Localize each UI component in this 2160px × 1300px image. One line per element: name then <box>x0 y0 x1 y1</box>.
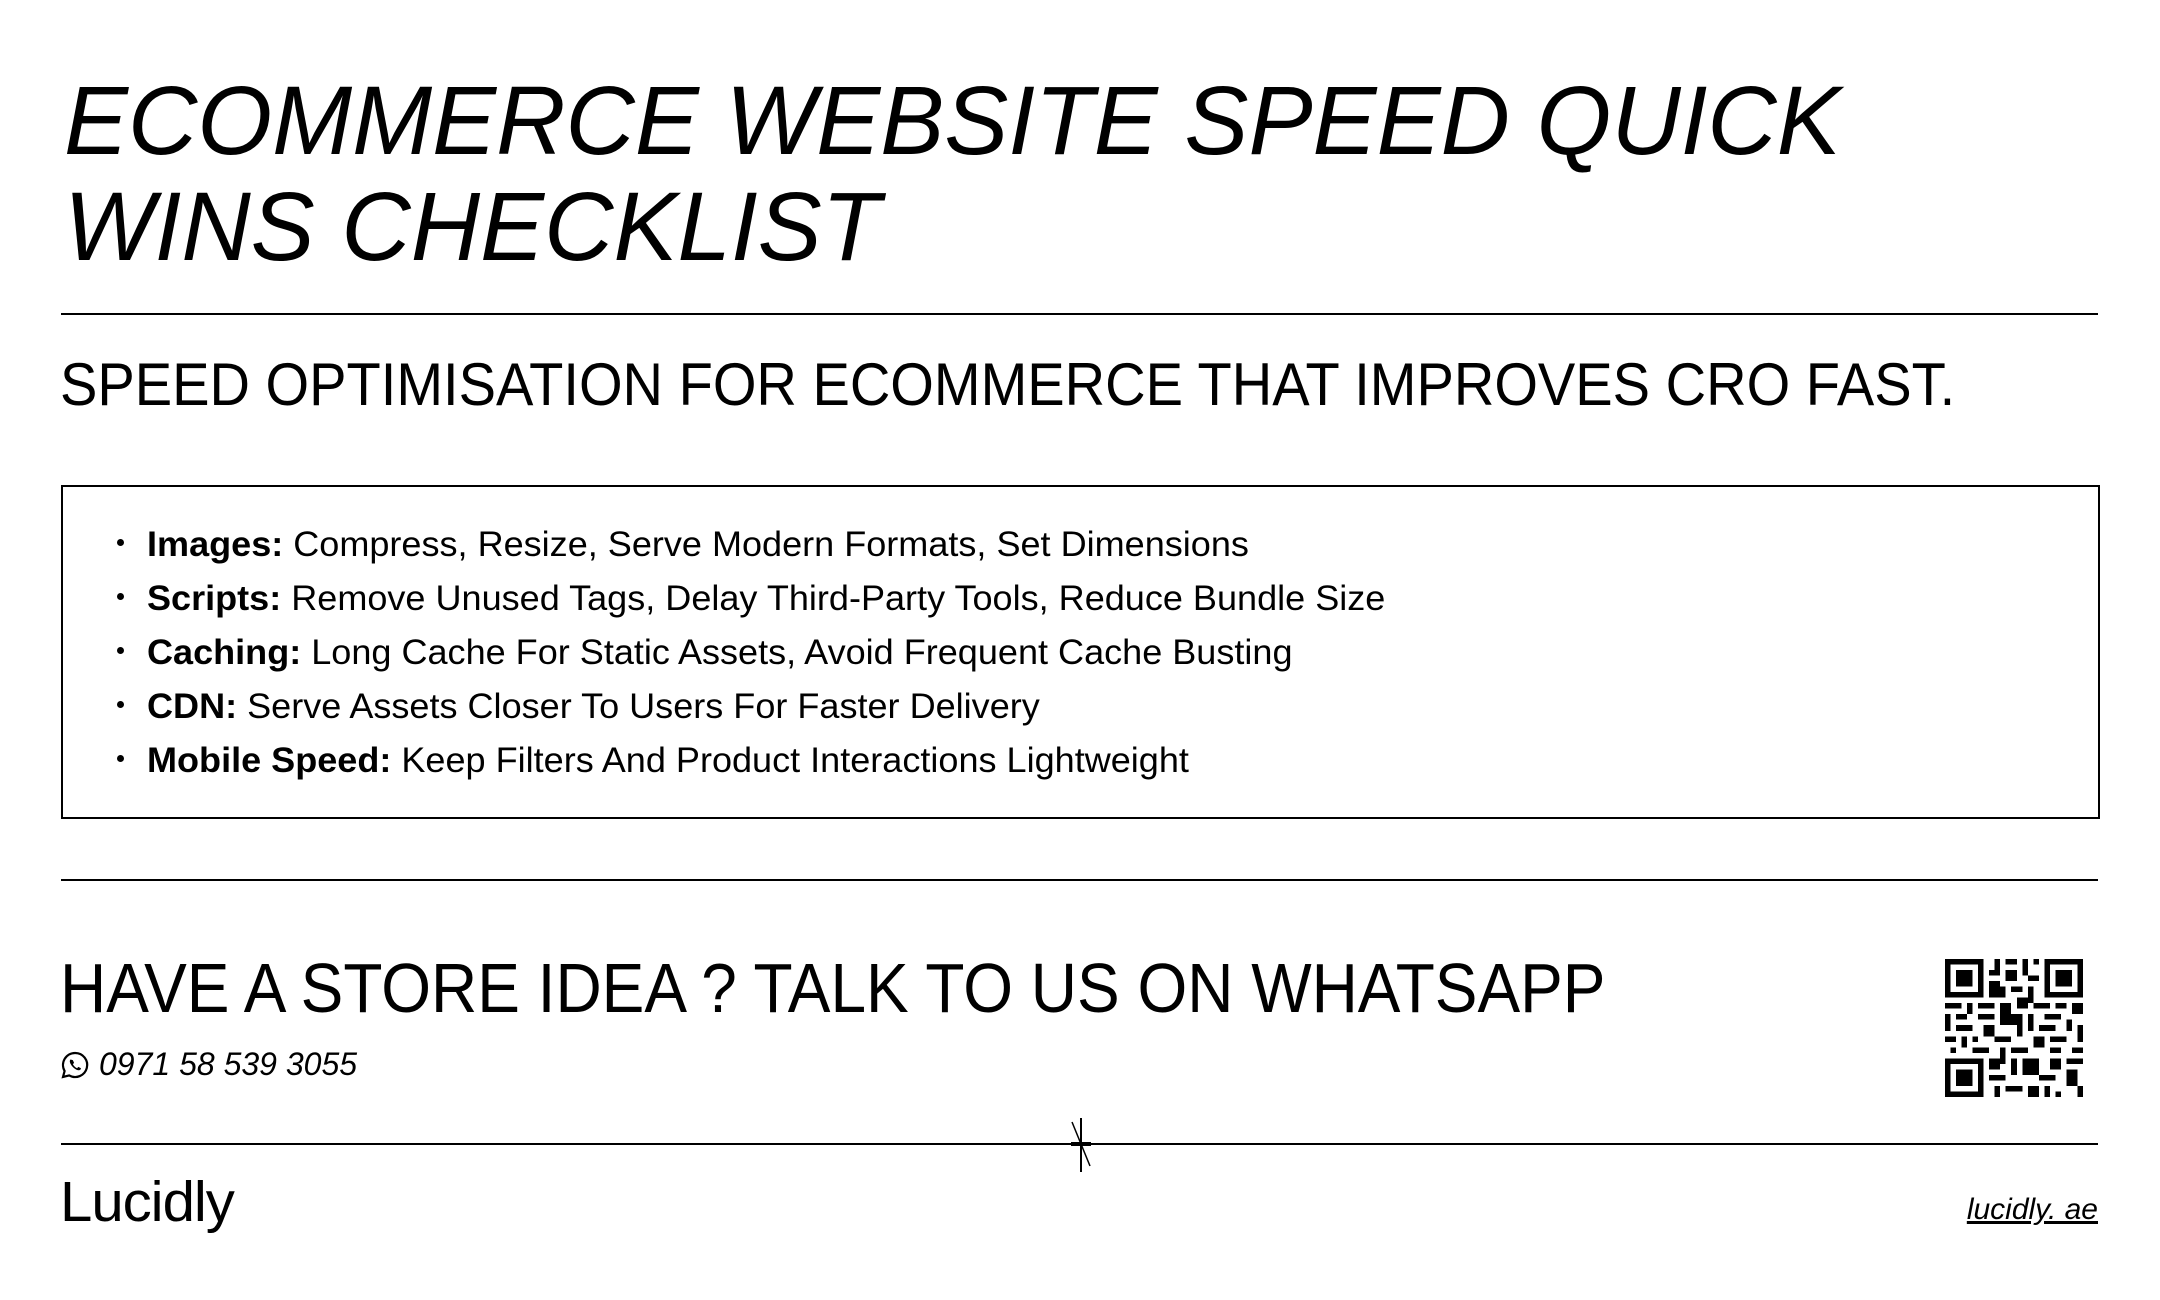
subtitle: SPEED OPTIMISATION FOR ECOMMERCE THAT IMPROVES CRO FAST. <box>60 351 1955 418</box>
qr code <box>1945 959 2083 1097</box>
bullet: cdn: CDN: Serve Assets Closer To Users For Faster Delivery <box>147 687 1040 726</box>
title: ECOMMERCE WEBSITE SPEED QUICK <box>64 66 1841 175</box>
phone with whatsapp icon <box>62 1046 358 1082</box>
website link: lucidly. ae <box>1967 1193 2098 1226</box>
bullet: scripts: Scripts: Remove Unused Tags, Delay Third-Party Tools, Reduce Bundle Size <box>147 579 1385 618</box>
bullet: mobile speed: Mobile Speed: Keep Filters And Product Interactions Lightweight <box>147 741 1189 780</box>
panel: checklist <box>61 485 2100 819</box>
logo: Lucidly: Lucidly <box>60 1170 234 1234</box>
title <box>64 66 1844 281</box>
bullet: images: Images: Compress, Resize, Serve Modern Formats, Set Dimensions <box>147 525 1249 564</box>
icon: crosshair <box>1071 1118 1091 1172</box>
text: 0971 58 539 3055 <box>99 1046 357 1082</box>
icon: whatsapp <box>62 1052 88 1078</box>
bullet: caching: Caching: Long Cache For Static Assets, Avoid Frequent Cache Busting <box>147 633 1293 672</box>
cta heading: HAVE A STORE IDEA ? TALK TO US ON WHATSAPP <box>60 949 1605 1027</box>
title: WINS CHECKLIST <box>64 172 880 281</box>
